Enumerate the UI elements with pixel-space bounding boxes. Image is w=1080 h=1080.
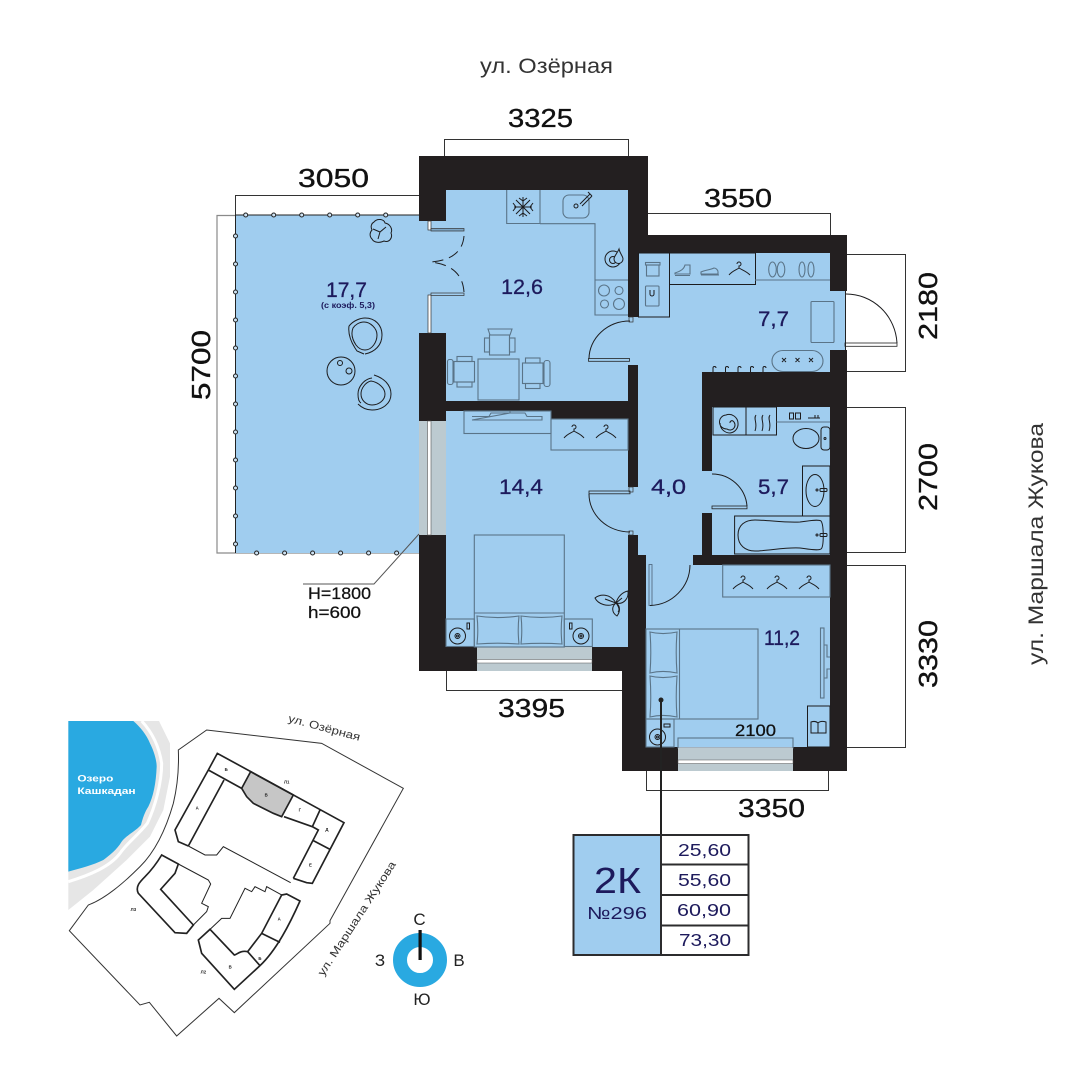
- building section labels: В: [229, 964, 232, 969]
- dimension 3350: 3350: [738, 793, 805, 823]
- building section labels: Б: [258, 956, 261, 961]
- apartment info table: 55,60: [678, 870, 731, 890]
- callout: window heights: h=600: [308, 603, 361, 622]
- compass: С: [413, 910, 426, 929]
- building section labels: Е: [309, 863, 312, 868]
- apartment info table: 60,90: [677, 900, 731, 920]
- building section labels: Д: [325, 827, 328, 832]
- terrace coefficient note: (с коэф. 5,3): [321, 301, 375, 310]
- dimension 2700: 2700: [913, 443, 943, 511]
- room area 4,0: 4,0: [651, 476, 686, 499]
- room area 11,2: 11,2: [764, 627, 800, 650]
- lake name: Озеро: [77, 774, 114, 784]
- street name on plan: Ozyornaya: ул. Озёрная: [287, 713, 362, 744]
- lake shore bands: [68, 721, 170, 910]
- door: kitchen: [588, 317, 633, 361]
- room area 12,6: 12,6: [501, 276, 543, 299]
- dimension 2180: 2180: [913, 272, 943, 340]
- compass: З: [375, 951, 385, 970]
- building L2: [198, 887, 300, 989]
- room area 5,7: 5,7: [758, 476, 789, 499]
- building section labels: [131, 767, 328, 974]
- dimension 3550: 3550: [704, 183, 772, 213]
- compass: Ю: [413, 990, 431, 1009]
- apartment info table: №296: [587, 903, 647, 923]
- dimension 3325: 3325: [508, 103, 573, 133]
- door: bedroom 14.4: [589, 487, 633, 535]
- compass: В: [453, 951, 465, 970]
- furniture: terrace chairs and table: [327, 318, 391, 410]
- apartment info table: 2К: [594, 860, 641, 901]
- lake name: Кашкадан: [77, 786, 136, 796]
- furniture: bedroom 14.4: [446, 411, 628, 647]
- furniture: terrace plant: [370, 219, 392, 242]
- dimension lines: [217, 140, 906, 790]
- compass: [375, 910, 465, 1009]
- window: terrace side: [419, 421, 446, 535]
- callout: window heights: [303, 534, 419, 622]
- door: bedroom 11.2: [649, 564, 690, 606]
- room area 7,7: 7,7: [758, 308, 789, 331]
- terrace double door: [428, 221, 464, 333]
- dimension 5700: 5700: [186, 330, 216, 400]
- dimension 3395: 3395: [498, 693, 565, 723]
- window: bedroom 11.2: [678, 738, 793, 771]
- furniture: bedroom 11.2: [646, 565, 830, 747]
- street name on plan: Zhukova: ул. Маршала Жукова: [316, 858, 399, 978]
- apartment info table: 25,60: [678, 840, 731, 860]
- building section labels: Л2: [201, 969, 207, 974]
- apartment info table: 73,30: [679, 930, 731, 950]
- dimension 3050: 3050: [298, 163, 369, 193]
- apartment floor fill: [236, 190, 845, 747]
- room area 14,4: 14,4: [499, 476, 543, 499]
- furniture: bathroom: [713, 407, 830, 554]
- dimension 3330: 3330: [913, 620, 943, 688]
- street label: Marshala Zhukova: ул. Маршала Жукова: [1025, 423, 1048, 665]
- leader line: window to table: [658, 698, 664, 834]
- building section labels: А: [278, 917, 282, 922]
- building section labels: Б: [225, 767, 228, 772]
- door: bathroom: [712, 474, 747, 509]
- walls: [419, 156, 847, 771]
- callout: window heights: H=1800: [308, 584, 371, 603]
- apartment info table: [574, 835, 749, 955]
- window width 2100: 2100: [735, 721, 776, 740]
- lake name: [77, 774, 136, 796]
- site boundary: [69, 730, 403, 1036]
- furniture: kitchen: [448, 190, 628, 400]
- building L3: [137, 855, 211, 933]
- building section labels: Л1: [284, 779, 290, 784]
- site plan: [68, 713, 403, 1036]
- window: bedroom 14.4: [477, 647, 592, 671]
- building section labels: Г: [299, 808, 302, 813]
- terrace railing posts: [234, 213, 419, 555]
- room area 17,7: 17,7: [326, 279, 367, 302]
- building section labels: А: [196, 805, 200, 810]
- door: exit to balcony right: [845, 291, 897, 350]
- building section labels: Л3: [131, 907, 137, 912]
- building section labels: В: [265, 793, 268, 798]
- building L1: [175, 753, 344, 883]
- street label: Ozyornaya: ул. Озёрная: [480, 55, 613, 78]
- furniture: hallway storage: [638, 253, 834, 372]
- lake: [68, 721, 157, 872]
